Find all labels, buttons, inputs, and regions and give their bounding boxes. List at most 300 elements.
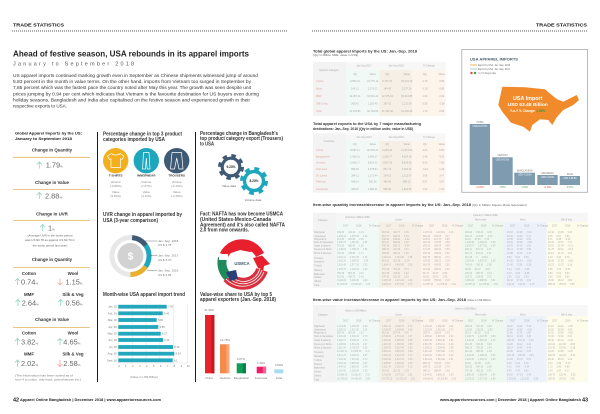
table: 2017 [343,224,349,227]
legend [470,63,510,75]
bar chart: 7.85% [499,187,506,189]
footnote: (The information has been sorted as of [15,374,73,378]
donut labels: Jan.-Sep. 2016 [158,268,179,272]
table: 184.20 190.44 3.38 [465,232,492,234]
table: 895.20 [351,168,359,171]
table: 0.56 [423,103,428,106]
change in quantity by fibre: 2.64% [22,298,39,307]
table: Playwear & [314,238,326,241]
table: 912.44 930.12 1.94 [465,351,492,353]
table: 7.85 [439,162,445,165]
table: 12.40 13.05 5.24 [548,232,573,234]
table: % Change [412,320,424,322]
table: Value [404,143,410,146]
change in value by fibre: Change in Value [35,317,70,322]
table: 326.70 335.62 2.73 [423,333,450,335]
bar chart: Vietnam [220,376,231,380]
bar chart: Bangladesh [234,376,250,380]
table: 3.97 [439,181,445,184]
category stats: (7.67%) [141,184,152,188]
table: 388.12 398.44 2.66 [423,370,450,372]
table: 64,436.29 [401,110,413,113]
horizontal bar chart: 5.85 [160,325,165,329]
icon: trousers [164,148,189,173]
table: 1,204.10 1,234.72 2.54 [465,359,496,361]
table: 287.02 [383,103,392,106]
table: 5.67 [423,181,428,184]
table: 618.29 634.55 2.62 [423,265,450,267]
table: 44.10 43.22 -2.00 [548,326,574,328]
panel heading: January to September 2018 [15,136,73,141]
icon: USA map with total: USA Import [513,96,543,102]
table: 611.72 623.44 1.91 [465,253,492,255]
table: 815.21 824.90 1.18 [382,242,409,244]
table: Sweaters [314,355,325,358]
category stats: TROUSERS [168,174,185,178]
horizontal bar chart: 1 [125,364,127,368]
table: Babywear [314,367,325,370]
table: 2.88 [439,110,445,113]
table: 64.20 62.14 -3.20 [507,261,533,263]
change in UVR: Change in UVR [36,212,69,216]
change in value by fibre: 4.65% [63,337,81,346]
table: 15.80 16.12 2.02 [548,280,573,282]
panel: top 3 product categories [103,132,189,198]
intro paragraph: 7.85 percent which was the fastest pace the country noted after May this year. The growth was seen despite unit [13,85,252,90]
horizontal bar chart: Jan, 18 [108,305,117,309]
table: 5,302.71 5,448.16 2.74 [337,340,368,342]
table: 1,053.14 1,078.63 2.42 [337,236,368,238]
bar chart: 4.67% [237,357,246,361]
table: 1,401.26 1,438.10 2.63 [465,355,496,357]
table: 2017 [510,224,516,227]
change in quantity by fibre: Silk & Veg [62,292,84,297]
horizontal bar chart: 10 [187,364,190,368]
table: 2.64 [423,95,428,98]
table: -1.15 [422,87,428,90]
category stats: Value [143,190,150,194]
table: Shirts & blouses [314,347,332,350]
table: 22.18 21.04 -5.13 [548,246,574,248]
icon: value gear: Value data [222,184,236,188]
legend: Export by USA: Jan.-Sep. 2017 [478,67,510,71]
table: Qty [353,143,358,146]
change in quantity [13,148,90,170]
horizontal bar chart: 8.34 [176,352,181,356]
table: 2018 [565,224,571,227]
table: 20,654.21 [367,149,379,152]
table: 34.22 33.06 -3.38 [507,242,533,244]
table: 274.30 281.58 2.65 [337,239,364,241]
table: Category [318,314,329,316]
table: 2,018.44 2,066.20 2.37 [337,363,368,365]
table: 284.11 [351,175,359,178]
heading: Value-wise share to USA by top 5 [200,292,272,298]
table: 8.15 8.47 3.92 [548,236,570,238]
change in UVR [13,212,90,248]
heading: USA (3-year comparison) [103,218,158,224]
bar chart: INDIA [567,173,574,176]
intro paragraph: holiday seasons. Bangladesh and India also capitalised on the festive season and experienced growth in their [13,97,251,102]
table: % Change [452,224,464,227]
table: 21,534.40 [382,110,393,113]
table: 18.40 19.72 7.17 [548,242,573,244]
table: 91.72 94.07 2.56 [423,273,448,275]
table: 24,775.12 [367,80,379,83]
intro paragraph [13,73,260,109]
change in quantity: 1.79% [46,161,63,170]
table: Qty [423,143,428,146]
legend: Export by USA: Jan.-Sep. 2018 [478,63,510,67]
table heading: Total apparel exports to the USA by 7 major manufacturing [313,121,422,126]
intro paragraph: respective exports to USA. [13,104,67,109]
donut labels: US $ 3.70 [158,258,172,262]
table: Wool [520,218,526,222]
change in UVR: the same period last year) [33,244,67,248]
bar chart: USD 3.32 Bn [541,177,555,179]
table: Wool [316,86,322,90]
donut labels [139,239,179,277]
table: Dresses & Skirts [314,343,332,346]
table: 9,084.22 [382,149,393,152]
table: 5.14 4.90 -4.66 [507,269,530,271]
table: 3,321.11 [402,168,412,171]
table: 233.18 239.05 2.51 [423,253,450,255]
table: 745.83 768.10 2.98 [465,265,492,267]
table: 1,041.22 1,066.30 2.41 [423,326,454,328]
table: 124.71 129.36 3.72 [465,276,492,278]
table: 1.88 1.72 -8.51 [548,269,571,271]
icon: innerwear [134,148,159,173]
table: 412.60 418.75 1.49 [337,276,364,278]
heading: apparel exporters (Jan.-Sep. 2018) [200,297,276,303]
table: 2018 [524,320,530,322]
category stats: (-0.86%) [110,184,121,188]
table: 1.79 [423,110,428,113]
table: 988.13 [403,181,411,184]
footnote [15,374,81,382]
table: 2018 [356,224,362,227]
table: 182.30 191.44 5.01 [507,340,534,342]
table: Playwear & [314,332,326,335]
heading: categories imported by USA [103,137,165,143]
horizontal bar chart: Jul, 18 [109,345,117,349]
table: Hosiery [314,363,323,366]
table: 144.43 [383,87,392,90]
table: 314.20 322.16 2.53 [382,370,409,372]
table: Cotton [395,218,403,222]
table: 8,681.11 [350,149,360,152]
table: 6.71 6.48 -3.42 [548,239,571,241]
panel: NAFTA fact [200,212,285,286]
table: Value [370,73,376,76]
table: 2017 [468,224,474,227]
table: 26.14 27.08 3.59 [507,249,532,251]
table: 1,866.30 1,902.44 1.94 [465,374,496,376]
table: 540.18 536.72 -0.64 [382,246,410,248]
bar chart: +1.29% [544,187,551,189]
table: Category [318,219,329,222]
category stats: Volume [111,180,121,184]
table heading: (Qty in Million SME; value in US$) [313,53,358,57]
table: 881.45 912.06 3.47 [423,236,450,238]
bar chart: USD 2.98 Bn [563,178,577,180]
change in value: 2.88% [45,191,62,200]
panel: global import changes [13,130,90,382]
table: Others [314,374,322,377]
table: Value in US$ Million [455,308,477,310]
table: Silk & Veg [561,314,573,316]
table: 3,205.11 3,312.80 3.36 [337,330,368,332]
icon: volume gear: 8.23% [249,179,259,183]
table: 8.92 9.41 5.49 [507,257,529,259]
table: 455.80 462.14 1.39 [382,253,409,255]
table: 44.26 46.70 5.51 [507,359,532,361]
table: 3,983.27 [368,156,378,159]
table: 285.42 287.02 0.56 [548,379,575,381]
horizontal bar chart: 8.13 [174,345,180,349]
fact text: 2.0 from now onwards. [200,228,250,234]
table heading: Item-wise value increase/decrease in apparel imports by the US: Jan.-Sep. 2018 [313,297,467,302]
table: 1,804.71 1,842.60 2.09 [382,265,413,267]
table: % Change [412,224,424,227]
table: Trousers [314,257,324,260]
table: 2017 [468,320,474,322]
table heading: destinations: Jan.-Sep. 2018 (Qty in million units; value in US$) [313,126,414,131]
table: 44.20 46.12 4.34 [507,344,532,346]
heading [103,132,182,143]
table [313,213,589,288]
bar chart: 14.75% [220,338,230,342]
table: 94.12 97.66 3.76 [465,239,490,241]
table: Apparel Category [319,69,339,72]
table: 1,208.12 1,239.40 2.59 [423,348,454,350]
table: 1,043.27 1,077.61 3.29 [465,246,496,248]
footer left: Apparel Online Bangladesh | December 2018 | www.appareloresources.com [20,397,162,402]
subtitle: January to September 2018 [13,62,134,68]
table: 34,516.42 35,214.88 2.02 [423,379,457,381]
table: 3,104.22 3,166.40 2.00 [337,280,368,282]
table: 19.30 20.12 4.25 [507,351,532,353]
table: 285.33 296.18 3.80 [423,246,450,248]
table: % Change [369,320,381,322]
table heading [313,48,418,57]
table: 2,118.30 2,183.55 3.08 [382,340,413,342]
table: Shirts & blouses [314,252,332,255]
intro paragraph: prices jumping by 0.94 per cent which indicates that Vietnam is the favourite destination for US buyers even during [13,91,260,96]
change in value by fibre: 3.82% [21,337,38,346]
table: 35,214.88 [401,95,413,98]
bar chart: 4.49% [257,361,266,365]
table: 66.38 68.15 2.66 [423,276,448,278]
horizontal bar chart: Apr, 18 [108,325,117,329]
table: 2017 [343,320,349,322]
table: 2018 [481,224,487,227]
table: 0.74 [423,80,428,83]
change in value [13,180,90,200]
horizontal bar chart: 7.00 [168,305,174,309]
bar chart [470,121,580,189]
table: 98.40 96.12 -2.32 [548,340,574,342]
table: 9,614.35 [402,162,412,165]
table: 1,172.44 [368,175,378,178]
table: 62,720.80 64,436.29 2.88 [337,379,371,381]
change in value: Change in Value [35,180,70,185]
table: 52.41 54.30 3.60 [507,246,532,248]
table [313,62,446,116]
table: 1,205.18 1,221.42 1.34 [382,280,413,282]
table: 146.12 [351,87,359,90]
table: 245.10 256.74 4.74 [465,273,492,275]
table: Silk & Veg [561,218,573,222]
table: 460.85 [383,181,392,184]
bar chart: 4.29% [521,187,528,189]
table: 2017 [386,320,392,322]
icon: t-shirt [103,148,128,173]
table: 220.17 214.88 -2.40 [465,236,493,238]
table: % Change [452,320,464,322]
table: 2018 [565,320,571,322]
table: 4,405.62 4,510.24 2.37 [337,344,368,346]
table: 1,253.40 [368,103,378,106]
table: 45.18 42.63 -5.64 [507,232,533,234]
table: 1,844.10 1,890.22 2.50 [423,374,454,376]
table: 12,375.64 [382,95,393,98]
table: 38.20 40.16 5.13 [507,326,532,328]
bar chart: 3.83% [275,363,284,367]
table: T-shirts [314,359,323,362]
table: 206.72 212.30 2.70 [423,367,450,369]
table: 322.50 330.12 2.36 [423,261,450,263]
table: 436.14 [351,181,359,184]
table: Cotton [395,314,403,316]
table: 372.18 382.10 2.67 [465,370,492,372]
table: 146.12 144.43 -1.15 [507,284,535,286]
table: 174.26 180.42 3.53 [423,249,450,251]
table: 1,944.12 1,992.40 2.48 [337,367,368,369]
horizontal bar chart [107,304,190,379]
panel: value-wise share [200,292,284,380]
table: 1,814.22 1,861.60 2.61 [423,359,454,361]
table: 2,902.44 2,984.10 2.81 [423,340,454,342]
table: 2017 [429,320,435,322]
table: Sri Lanka [316,174,328,178]
table: 1,197.14 1,223.51 2.20 [423,232,454,234]
table: 12,057.11 12,375.64 2.64 [465,284,499,286]
table: 4.12 4.04 -1.94 [507,367,530,369]
table: -2.58 [439,103,445,106]
table: 2018 [399,320,405,322]
fact text: Agreement) and it's also called NAFTA [200,222,285,228]
table: 8,663.21 8,727.31 0.74 [382,284,413,286]
table: 31.75 30.12 -5.13 [548,249,574,251]
table: Quantity in Million SME [345,216,370,219]
table: 14.88 15.20 2.15 [507,253,532,255]
table: 40.12 41.73 4.01 [548,253,573,255]
section label right: TRADE STATISTICS [536,22,588,28]
horizontal bar chart: 4 [146,364,148,368]
bar chart: USD 4.15 Bn [518,175,532,177]
icon: value gear: 9.23% [226,165,236,169]
table: 2,176.12 2,277.16 4.65 [465,379,496,381]
table: 1,286.73 1,311.50 1.92 [337,242,368,244]
table: 3.82 [439,80,445,83]
table: 11.36 11.70 2.99 [507,333,531,335]
category stats: (3.81%) [110,194,121,198]
table: % Change [537,320,549,322]
bar chart: USD 21.87 Bn [473,126,488,128]
table: 3.46 [423,156,428,159]
table: Total [314,379,320,382]
change in quantity by fibre: MMF [24,292,34,297]
table: 1,208.30 1,236.40 2.33 [382,363,413,365]
table: 2,316.10 2,402.33 3.72 [382,355,413,357]
change in UVR: (Average UVR in the entire period [28,234,73,238]
table: 14.20 13.88 -2.25 [548,351,574,353]
donut chart: $ [128,252,134,262]
table: 972.55 988.40 1.62 [337,246,364,248]
change in quantity: Change in Quantity [32,148,73,152]
table: 7,122.16 7,315.90 2.72 [337,359,368,361]
table: 686.12 704.36 2.66 [423,363,450,365]
table: % Change [423,136,435,139]
panel: exports by destination table [313,121,446,193]
table: 9,318.42 9,662.51 3.69 [382,351,413,353]
footnote: from 4 to cotton, only wool, cotton/viscose etc.) [15,378,81,382]
table: Dresses & Skirts [314,248,332,251]
table: 3.47 [439,175,445,178]
table: 3,612.20 3,674.80 1.73 [423,351,454,353]
bar chart: BANGLADESH [517,170,533,173]
table: 1,286.40 1,315.22 2.24 [423,336,454,338]
table: 296.12 307.45 3.83 [465,326,492,328]
table: 388.40 401.26 3.31 [382,249,409,251]
horizontal bar chart: 6.27 [162,332,168,336]
change in value by fibre: Silk & Veg [62,352,84,356]
table: 7.24 [439,188,445,191]
table: 4.40 4.70 6.82 [507,370,529,372]
heading: Percentage change in Bangladesh's [200,131,278,137]
icon: volume gear [242,169,266,202]
horizontal bar chart: 2 [132,364,134,368]
table: 5,014.72 5,148.61 2.67 [337,355,368,357]
category stats: T-SHIRTS [109,174,123,178]
table: 716.34 728.66 1.71 [337,253,364,255]
category stats: (-4.29%) [171,194,182,198]
table: 362.10 371.55 2.60 [423,242,450,244]
table: 5.30 [423,162,428,165]
table: 412.36 418.22 1.42 [382,273,409,275]
table: % Change [577,320,589,322]
table: 34,516.42 [367,95,379,98]
table: 1,140.62 1,158.19 1.54 [337,249,368,251]
table: 902.11 921.74 2.17 [465,249,492,251]
table: 128.70 125.44 -2.53 [548,374,576,376]
table: Qty [385,143,390,146]
panel: item-wise value table [313,297,589,382]
table: 21,151.86 21,534.40 1.79 [337,284,371,286]
bar chart: CHINA [476,121,484,124]
table: Qty [423,73,428,76]
table: Jan-Sep 2018 [388,64,404,68]
table: 0.84 0.91 8.33 [548,273,570,275]
table: 512.38 0 -100.0 [465,257,489,259]
table: Suits & Separates [314,335,334,338]
intro paragraph: 5.83 percent in the month in value terms. On the other hand, imports from Vietnam too surged in September by [13,79,252,84]
change in quantity by fibre [13,257,90,307]
table [313,305,589,382]
table: 2018 [481,320,487,322]
